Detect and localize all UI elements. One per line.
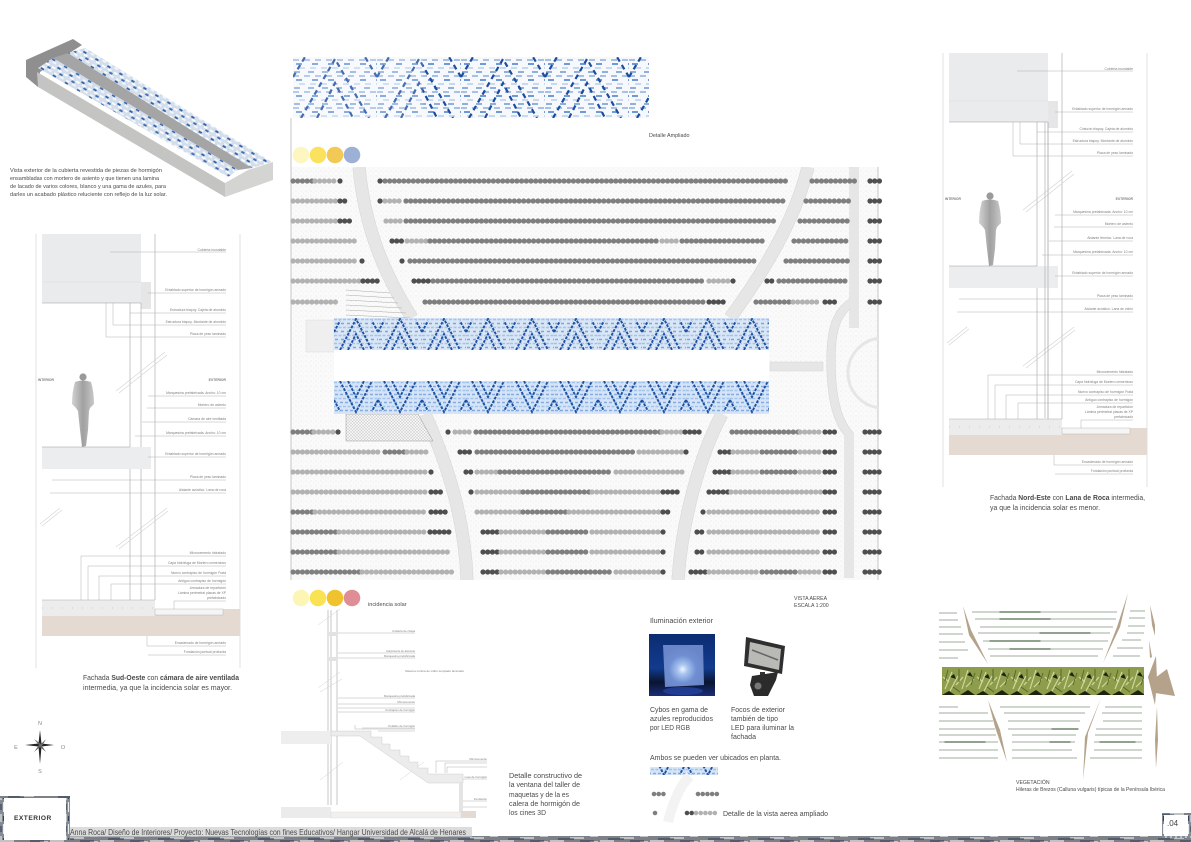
aerial view scale: ESCALA 1:200 (794, 603, 829, 609)
aerial detail label: Detalle de la vista aerea ampliado (723, 809, 828, 818)
south-west facade section: Antiguo contrapiso de hormigón (178, 579, 226, 583)
vegetation caption (1016, 779, 1165, 793)
roof caption: ensambladas con mortero de asiento y que tienen una lamina (10, 176, 160, 182)
south-west facade section: Entablado superior de hormigón armado (165, 452, 226, 456)
south-west facade section: Marquesina prefabricada. Ancho: 10 cm (166, 431, 226, 435)
cube caption (650, 705, 713, 732)
footer credit band: Anna Roca/ Diseño de Interiores/ Proyecto: Nuevas Tecnologías con fines Educativos/ Hangar Universidad de Alcalá de Henares (70, 828, 466, 837)
constructive section: Marquesina prefabricada (384, 654, 415, 658)
tree rows north (293, 181, 880, 302)
north-east facade section: Mortero de asiento (1105, 222, 1133, 226)
floodlight caption: Focos de exterior (731, 705, 785, 714)
north-east facade section: Armadura de repartición (1097, 405, 1133, 409)
roof caption (10, 168, 167, 198)
compass rose: E (14, 745, 18, 751)
roof caption: Vista exterior de la cubierta revestida de piezas de hormigón (10, 168, 162, 174)
aerial plan (291, 118, 918, 580)
plan location note: Ambos se pueden ver ubicados en planta. (650, 753, 781, 762)
north-east facade section: Cubierta inundable (1105, 67, 1133, 71)
compass rose: S (38, 769, 42, 775)
floodlight caption (731, 705, 795, 741)
constructive section: Carpintería de aluminio (386, 649, 415, 653)
constructive section: Losa de hormigón (465, 775, 487, 779)
north-east facade section: Aislante acústico. Lana de vidrio (1084, 307, 1133, 311)
enlarged mosaic detail (293, 57, 649, 118)
isometric roof view (26, 39, 273, 197)
vegetation caption: VEGETACIÓN (1016, 779, 1050, 786)
south-west facade section: Mortero de asiento (198, 403, 226, 407)
walkways (359, 167, 918, 580)
south-west facade section: Marquesina prefabricada. Ancho: 10 cm (166, 391, 226, 395)
south-west facade section: Cubierta inundable (198, 248, 226, 252)
south-west facade section: Placa de yeso laminado (190, 332, 226, 336)
cube caption: por LED RGB (650, 723, 690, 732)
south-west caption (83, 673, 240, 692)
south-west facade section: Nuevo contrapiso de hormigón Fratá (171, 571, 226, 575)
north-east facade section: Encadenado de hormigón armado (1082, 460, 1133, 464)
constructive section: Marquesina prefabricada (384, 694, 415, 698)
north-east facade section: Placa de yeso laminado (1097, 151, 1133, 155)
solar dots bottom (293, 590, 360, 606)
north-east facade section: Entablado superior de hormigón armado (1072, 107, 1133, 111)
south-west facade section: Placa de yeso laminado (190, 475, 226, 479)
aerial view scale (794, 596, 829, 609)
north-east facade section: Marquesina prefabricada. Ancho: 10 cm (1073, 210, 1133, 214)
constructive section: Fundación (474, 797, 487, 801)
south-west facade section: EXTERIOR (209, 378, 227, 382)
tree rows south (293, 432, 881, 572)
north-east facade section: Nuevo contrapiso de hormigón Fratá (1078, 390, 1133, 394)
compass rose: N (38, 721, 42, 727)
lighting heading: Iluminación exterior (650, 616, 713, 625)
north-east facade section: Fundación puntual profunda (1091, 469, 1133, 473)
south-west facade section: INTERIOR (38, 378, 55, 382)
aerial view scale: VISTA AEREA (794, 596, 828, 602)
floodlight caption: también de tipo (731, 714, 778, 723)
north-east facade section: Estructura biapoy. Montante de aluminio (1073, 139, 1133, 143)
south-west facade section: Entablado superior de hormigón armado (165, 288, 226, 292)
page number (1162, 813, 1191, 838)
north-east caption: ya que la incidencia solar es menor. (990, 503, 1100, 512)
north-east facade section: Marquesina prefabricada. Ancho: 10 cm (1073, 250, 1133, 254)
south-west caption: Fachada Sud-Oeste con cámara de aire ventilada (83, 673, 240, 682)
side annex square (306, 320, 334, 352)
floodlight caption: LED para iluminar la (731, 723, 795, 732)
roof caption: de lacado de varios colores, blanco y una gama de azules, para (10, 184, 167, 190)
entrance stairs hatch (346, 290, 410, 318)
constructive section: Cubierta de chapa (392, 629, 415, 633)
south-west facade section: Armadura de repartición (190, 586, 226, 590)
constructive detail caption (509, 771, 582, 817)
solar dots top (293, 147, 360, 163)
north-east facade section: Capa hidrófuga de Mortero cementoso (1075, 380, 1133, 384)
constructive section: Microcemento (469, 757, 487, 761)
south-west facade section: Microcemento hidratado (190, 551, 226, 555)
south-west facade section: Cámara de aire ventilada (188, 417, 226, 421)
north-east caption: Fachada Nord-Este con Lana de Roca intermedia, (990, 493, 1145, 502)
photo: floodlight (744, 637, 785, 696)
building with mosaic roof (334, 318, 769, 414)
south-west facade section: Encadenado de hormigón armado (175, 641, 226, 645)
vegetation plan (939, 593, 1175, 780)
north-east facade section (943, 53, 1147, 487)
south-west facade section: prefabricado (207, 596, 226, 600)
south-west facade section: Fundación puntual profunda (184, 650, 226, 654)
side walkway bar (770, 362, 823, 371)
photo: blue LED cube (649, 634, 715, 696)
crosshatched terrace (346, 414, 433, 441)
compass rose: O (61, 745, 66, 751)
north-east facade section: Placa de yeso laminado (1097, 294, 1133, 298)
plan key detail (650, 767, 718, 822)
north-east facade section: Aislante térmico. Lana de roca (1087, 236, 1133, 240)
north-east facade section: Lámina perimetral placas de XP (1085, 410, 1134, 414)
north-east facade section: Microcemento hidratado (1097, 370, 1133, 374)
north-east facade section: Entablado superior de hormigón armado (1072, 271, 1133, 275)
vegetation caption: Hileras de Brezos (Calluna vulgaris) típicas de la Península Ibérica (1016, 787, 1165, 793)
floodlight caption: fachada (731, 732, 757, 741)
constructive section: Microcemento (397, 700, 415, 704)
north-east facade section: Cinturón biapoy. Cajeta de aluminio (1080, 127, 1133, 131)
south-west facade section: Lámina perimetral placas de XP (178, 591, 227, 595)
constructive section: Sistema cortina de vidrio templado laminado (405, 669, 464, 673)
north-east facade section: EXTERIOR (1116, 197, 1134, 201)
south-west facade section (36, 234, 240, 668)
cube caption: azules reproducidos (650, 714, 713, 723)
constructive section: Contrapiso de hormigón (385, 708, 415, 712)
constructive section: Peldaño de hormigón (388, 724, 415, 728)
section tab: exterior: EXTERIOR (14, 815, 52, 822)
south-west facade section: Aislante acústico. Lana de roca (179, 488, 226, 492)
constructive section (281, 609, 487, 818)
page number: .04 (1167, 819, 1179, 828)
south-west facade section: Estructura biapoy. Montante de aluminio (166, 320, 226, 324)
roof caption: darles un acabado plástico reluciente con reflejo de la luz solar. (10, 192, 167, 198)
south-west facade section: Estructura biapoy. Cajeta de aluminio (170, 308, 226, 312)
constructive detail caption: la ventana del taller de (509, 780, 580, 789)
north-east facade section: INTERIOR (945, 197, 962, 201)
constructive detail caption: los cines 3D (509, 808, 546, 817)
north-east facade section: Antiguo contrapiso de hormigón (1085, 398, 1133, 402)
constructive detail caption: maquetas y de la es (509, 790, 569, 799)
north-east facade section: prefabricado (1114, 415, 1133, 419)
north-east caption (990, 493, 1145, 512)
cube caption: Cybos en gama de (650, 705, 708, 714)
constructive detail caption: calera de hormigón de (509, 799, 580, 808)
footer mosaic strip (65, 836, 1191, 842)
constructive detail caption: Detalle constructivo de (509, 771, 582, 780)
south-west caption: intermedia, ya que la incidencia solar es mayor. (83, 683, 232, 692)
section tab: exterior (0, 796, 70, 842)
detail label: Detalle Ampliado (649, 133, 689, 139)
compass rose (14, 721, 66, 775)
south-west facade section: Capa hidrófuga de Mortero cementoso (168, 561, 226, 565)
solar incidence label: incidencia solar (368, 602, 407, 608)
